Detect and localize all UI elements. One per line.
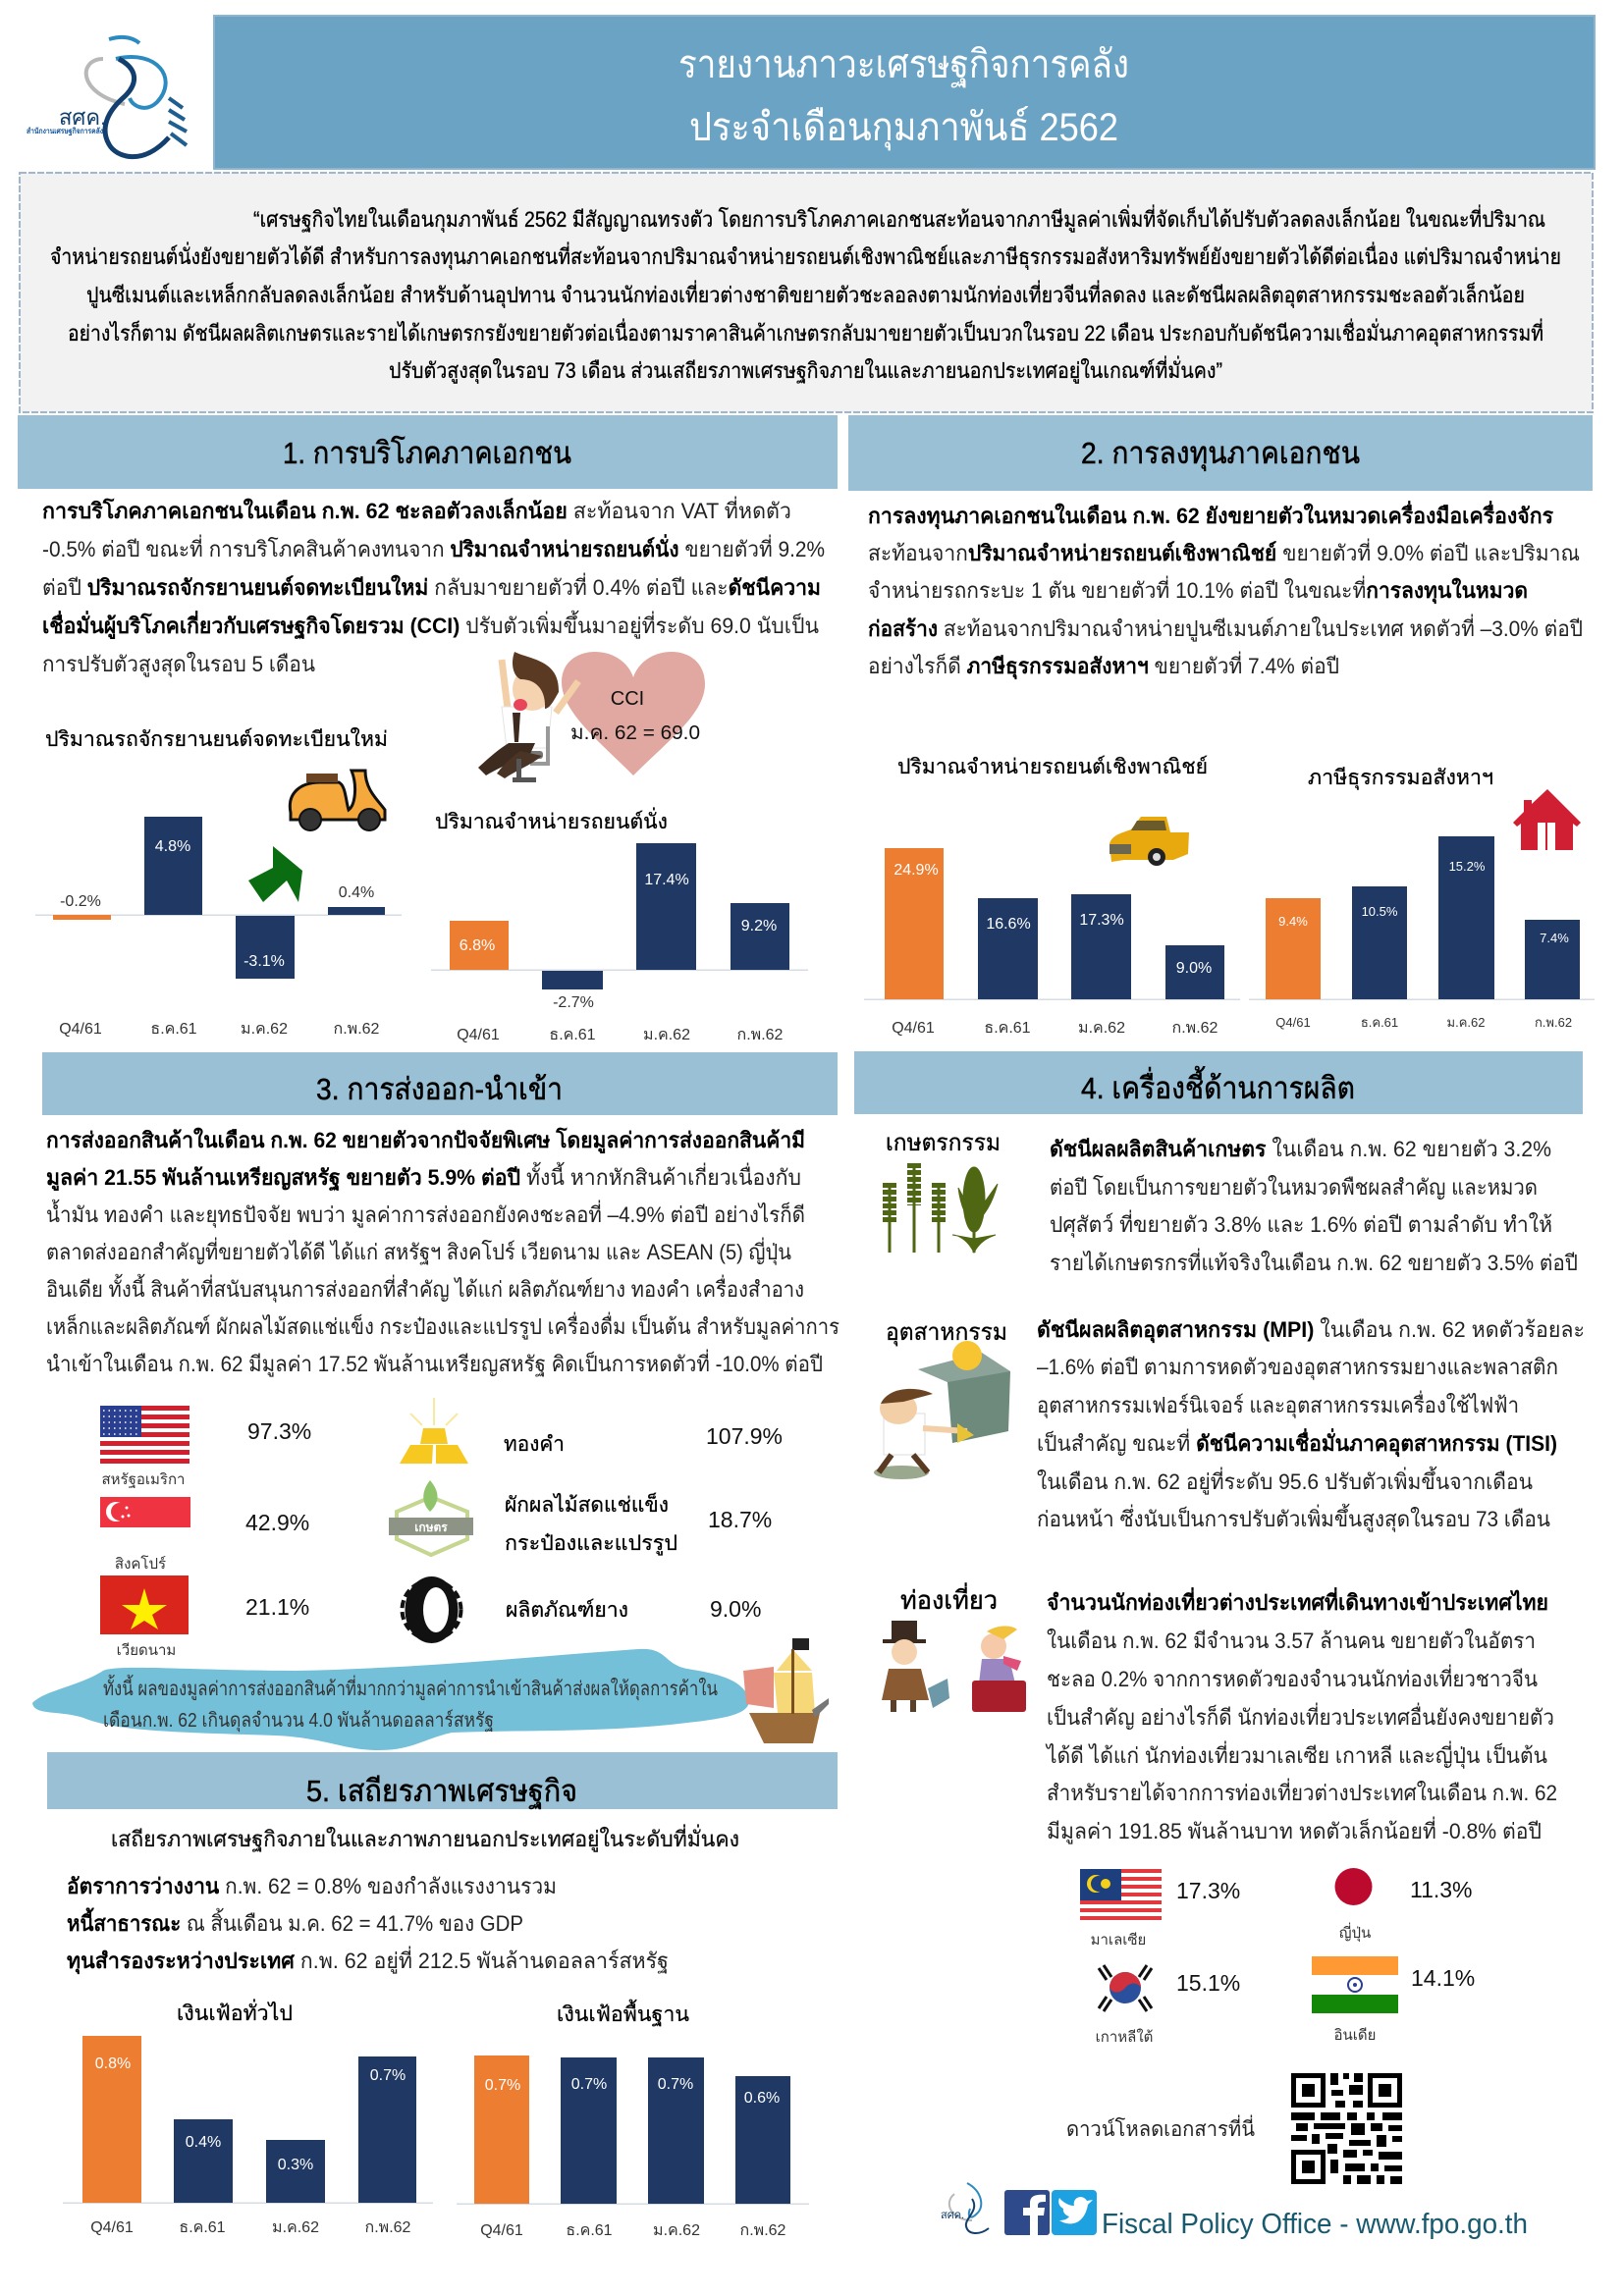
- chart title: real estate tax: ภาษีธุรกรรมอสังหาฯ: [1308, 767, 1493, 790]
- value: India: 14.1%: [1411, 1965, 1475, 1991]
- icon: gold bars: [400, 1398, 468, 1464]
- panel: section 1 private consumption: [18, 415, 838, 1043]
- title line 2: ประจำเดือนกุมภาพันธ์ 2562: [689, 105, 1118, 151]
- text block: agriculture: ต่อปี โดยเป็นการขยายตัวในหมวดพืชผลสำคัญ และหมวด: [1050, 1173, 1538, 1200]
- text block: tourism: ในเดือน ก.พ. 62 มีจำนวน 3.57 ล้านคน ขยายตัวในอัตรา: [1047, 1629, 1536, 1653]
- text block: tourism: ได้ดี ได้แก่ นักท่องเที่ยวมาเลเซีย เกาหลี และญี่ปุ่น เป็นต้น: [1045, 1740, 1547, 1769]
- heading 5: 5. เสถียรภาพเศรษฐกิจ: [306, 1774, 577, 1809]
- bar chart: commercial vehicles: 24.9%: [893, 862, 939, 879]
- text block 1: [42, 496, 825, 677]
- bar chart: motorcycle registrations: ม.ค.62: [241, 1021, 288, 1038]
- footer logo: [941, 2183, 989, 2233]
- text block 2: [868, 500, 1583, 680]
- value: rubber products: 9.0%: [710, 1596, 761, 1622]
- text block 3: การส่งออกสินค้าในเดือน ก.พ. 62 ขยายตัวจากปัจจัยพิเศษ โดยมูลค่าการส่งออกสินค้ามี: [46, 1127, 805, 1154]
- subheading 5: เสถียรภาพเศรษฐกิจภายในและภาพภายนอกประเทศอยู่ในระดับที่มั่นคง: [111, 1824, 739, 1852]
- value: Singapore: 42.9%: [245, 1510, 309, 1535]
- value: Malaysia: 17.3%: [1176, 1878, 1240, 1903]
- value: Vietnam: 21.1%: [245, 1594, 309, 1620]
- label: vegetables and fruit: ผักผลไม้สดแช่แข็ง: [505, 1491, 669, 1517]
- bar chart: core inflation: ธ.ค.61: [566, 2222, 613, 2239]
- label: vegetables and fruit: กระป๋องและแปรรูป: [505, 1532, 677, 1556]
- icon: tire: [403, 1576, 461, 1643]
- flag: India: อินเดีย: [1334, 2027, 1376, 2044]
- label: vegetables and fruit: [505, 1491, 677, 1556]
- flag: Japan: [1335, 1868, 1373, 1943]
- icon: tourists with luggage: [882, 1621, 1026, 1712]
- bar chart: headline inflation: 0.3%: [278, 2157, 313, 2173]
- bar chart: core inflation: [457, 2056, 809, 2239]
- icon: yellow pickup truck: [1110, 817, 1189, 866]
- chart title: core inflation: เงินเฟ้อพื้นฐาน: [557, 2000, 689, 2026]
- bar chart: headline inflation: ธ.ค.61: [179, 2219, 226, 2236]
- icon: heart with CCI: [562, 652, 705, 775]
- text block 1: เชื่อมั่นผู้บริโภคเกี่ยวกับเศรษฐกิจโดยรวม (CCI) ปรับตัวเพิ่มขึ้นมาอยู่ที่ระดับ 69.0 นับเป็น: [42, 610, 819, 640]
- panel: section 3 exports imports: [32, 1052, 839, 1750]
- label: industry: อุตสาหกรรม: [886, 1319, 1007, 1347]
- bar chart: commercial vehicles: 17.3%: [1079, 912, 1124, 929]
- label: rubber products: ผลิตภัณฑ์ยาง: [506, 1598, 628, 1622]
- bar chart: passenger cars: -2.7%: [553, 994, 594, 1011]
- bar chart: real estate tax: 9.4%: [1278, 914, 1308, 929]
- flag: Vietnam: เวียดนาม: [117, 1642, 176, 1659]
- heading 3: 3. การส่งออก-นำเข้า: [316, 1072, 563, 1106]
- bar chart: motorcycle registrations: 4.8%: [155, 838, 190, 855]
- label: agriculture: เกษตรกรรม: [886, 1130, 1001, 1156]
- icon: agriculture badge: [389, 1480, 473, 1555]
- text block 3: อินเดีย ทั้งนี้ สินค้าที่สนับสนุนการส่งออกที่สำคัญ ได้แก่ ผลิตภัณฑ์ยาง ทองคำ เครื่องสำอาง: [46, 1274, 804, 1303]
- icon: scooter: [290, 771, 385, 830]
- heading 4: 4. เครื่องชี้ด้านการผลิต: [1081, 1066, 1355, 1105]
- flag: Vietnam: [100, 1575, 189, 1659]
- icon: facebook: [1004, 2190, 1050, 2235]
- bar chart: real estate tax: 7.4%: [1540, 931, 1569, 945]
- text block 5: [67, 1874, 669, 1975]
- chart title: passenger cars: ปริมาณจำหน่ายรถยนต์นั่ง: [435, 807, 668, 833]
- text block: tourism: สำหรับรายได้จากการท่องเที่ยวต่างประเทศในเดือน ก.พ. 62: [1047, 1778, 1557, 1805]
- bar chart: headline inflation: 0.4%: [186, 2134, 221, 2151]
- flag: Japan: ญี่ปุ่น: [1339, 1922, 1371, 1943]
- summary box: [20, 173, 1593, 412]
- text block: industry: [1037, 1317, 1585, 1532]
- bar chart: passenger cars: [431, 843, 808, 1043]
- flag: Malaysia: [1080, 1869, 1162, 1949]
- bar chart: headline inflation: 0.8%: [95, 2056, 131, 2072]
- bar chart: headline inflation: ม.ค.62: [272, 2219, 319, 2236]
- flag: Korea: [1096, 1965, 1153, 2046]
- QR code: [1291, 2073, 1402, 2184]
- text block 3: มูลค่า 21.55 พันล้านเหรียญสหรัฐ ขยายตัว 5.9% ต่อปี ทั้งนี้ หากหักสินค้าเกี่ยวเนื่องกับ: [46, 1162, 801, 1192]
- value: Korea: 15.1%: [1176, 1970, 1240, 1996]
- text block: tourism: ชะลอ 0.2% จากการหดตัวของจำนวนนักท่องเที่ยวชาวจีน: [1047, 1664, 1538, 1691]
- bar chart: passenger cars: ธ.ค.61: [549, 1027, 596, 1043]
- bar chart: headline inflation: [63, 2036, 433, 2236]
- logo: fiscal policy office: สำนักงานเศรษฐกิจการคลัง: [27, 127, 103, 136]
- flag: Singapore: สิงคโปร์: [115, 1555, 166, 1573]
- bar chart: commercial vehicles: Q4/61: [892, 1020, 935, 1037]
- callout: trade balance water: เดือนก.พ. 62 เกินดุลจำนวน 4.0 พันล้านดอลลาร์สหรัฐ: [103, 1709, 494, 1733]
- bar chart: passenger cars: ม.ค.62: [643, 1027, 690, 1043]
- text: download here: ดาวน์โหลดเอกสารที่นี่: [1066, 2114, 1255, 2141]
- chart title: headline inflation: เงินเฟ้อทั่วไป: [177, 1999, 293, 2025]
- bar chart: motorcycle registrations: ก.พ.62: [334, 1021, 380, 1038]
- chart title: motorcycle registrations: ปริมาณรถจักรยานยนต์จดทะเบียนใหม่: [45, 727, 388, 751]
- bar chart: core inflation: 0.7%: [658, 2076, 693, 2093]
- text block 1: การบริโภคภาคเอกชนในเดือน ก.พ. 62 ชะลอตัวลงเล็กน้อย สะท้อนจาก VAT ที่หดตัว: [42, 496, 791, 523]
- bar chart: core inflation: 0.6%: [744, 2090, 780, 2107]
- bar chart: motorcycle registrations: [35, 817, 402, 1038]
- text block 2: การลงทุนภาคเอกชนในเดือน ก.พ. 62 ยังขยายตัวในหมวดเครื่องมือเครื่องจักร: [868, 500, 1553, 530]
- bar chart: real estate tax: Q4/61: [1275, 1015, 1311, 1030]
- text block: agriculture: รายได้เกษตรกรที่แท้จริงในเดือน ก.พ. 62 ขยายตัว 3.5% ต่อปี: [1050, 1248, 1578, 1275]
- bar chart: passenger cars: 6.8%: [460, 937, 495, 954]
- bar chart: passenger cars: 17.4%: [644, 872, 689, 888]
- icon: man at machine with light bulb: [874, 1341, 1010, 1479]
- bar chart: motorcycle registrations: -0.2%: [60, 893, 101, 910]
- value: USA: 97.3%: [247, 1418, 311, 1444]
- label: tourism: ท่องเที่ยว: [900, 1582, 998, 1615]
- bar chart: commercial vehicles: ม.ค.62: [1078, 1020, 1125, 1037]
- title banner: [214, 16, 1595, 169]
- bar chart: headline inflation: 0.7%: [370, 2067, 406, 2084]
- text block 3: นำเข้าในเดือน ก.พ. 62 มีมูลค่า 17.52 พันล้านเหรียญสหรัฐ คิดเป็นการหดตัวที่ -10.0% ต่อปี: [46, 1349, 823, 1377]
- icon: cheering man on chair: [478, 652, 578, 782]
- panel: section 5 stability: [47, 1752, 838, 2239]
- bar chart: headline inflation: ก.พ.62: [365, 2219, 411, 2236]
- text block: industry: เป็นสำคัญ ขณะที่ ดัชนีความเชื่อมั่นภาคอุตสาหกรรม (TISI): [1037, 1427, 1557, 1458]
- chart title: commercial vehicles: ปริมาณจำหน่ายรถยนต์เชิงพาณิชย์: [897, 755, 1208, 778]
- text block 2: จำหน่ายรถกระบะ 1 ตัน ขยายตัวที่ 10.1% ต่อปี ในขณะที่การลงทุนในหมวด: [868, 575, 1528, 605]
- bar chart: passenger cars: Q4/61: [457, 1027, 500, 1043]
- text block: tourism: เป็นสำคัญ อย่างไรก็ดี นักท่องเที่ยวประเทศอื่นยังคงขยายตัว: [1047, 1702, 1554, 1730]
- text block 1: การปรับตัวสูงสุดในรอบ 5 เดือน: [42, 652, 315, 677]
- text block 2: อย่างไรก็ดี ภาษีธุรกรรมอสังหาฯ ขยายตัวที่ 7.4% ต่อปี: [868, 651, 1339, 680]
- bar chart: real estate tax: ธ.ค.61: [1361, 1015, 1398, 1030]
- title line 1: รายงานภาวะเศรษฐกิจการคลัง: [678, 43, 1129, 88]
- icon: heart with CCI: CCI: [611, 688, 644, 710]
- text block 3: [46, 1127, 839, 1377]
- text block 3: เหล็กและผลิตภัณฑ์ ผักผลไม้สดแช่แข็ง กระป๋องและแปรรูป เครื่องดื่ม เป็นต้น สำหรับมูลค่าการ: [46, 1311, 839, 1340]
- text block 5: ทุนสำรองระหว่างประเทศ ก.พ. 62 อยู่ที่ 212.5 พันล้านดอลลาร์สหรัฐ: [67, 1946, 669, 1975]
- bar chart: motorcycle registrations: ธ.ค.61: [150, 1021, 197, 1038]
- value: Japan: 11.3%: [1410, 1877, 1473, 1902]
- icon: twitter: [1052, 2190, 1097, 2235]
- bar chart: commercial vehicles: ก.พ.62: [1172, 1020, 1218, 1037]
- bar chart: real estate tax: [1249, 836, 1595, 1030]
- text block: agriculture: ปศุสัตว์ ที่ขยายตัว 3.8% และ 1.6% ต่อปี ตามลำดับ ทำให้: [1050, 1209, 1552, 1238]
- text block: industry: อุตสาหกรรมเฟอร์นิเจอร์ และอุตสาหกรรมเครื่องใช้ไฟฟ้า: [1037, 1390, 1519, 1418]
- text block: agriculture: ดัชนีผลผลิตสินค้าเกษตร ในเดือน ก.พ. 62 ขยายตัว 3.2%: [1050, 1137, 1551, 1161]
- text block: industry: ในเดือน ก.พ. 62 อยู่ที่ระดับ 95.6 ปรับตัวเพิ่มขึ้นจากเดือน: [1037, 1467, 1533, 1495]
- text block: tourism: มีมูลค่า 191.85 พันล้านบาท หดตัวเล็กน้อยที่ -0.8% ต่อปี: [1047, 1816, 1542, 1844]
- text block 2: สะท้อนจากปริมาณจำหน่ายรถยนต์เชิงพาณิชย์ ขยายตัวที่ 9.0% ต่อปี และปริมาณ: [868, 538, 1580, 565]
- bar chart: motorcycle registrations: -3.1%: [244, 953, 285, 970]
- bar chart: commercial vehicles: ธ.ค.61: [984, 1020, 1031, 1037]
- flag: USA: สหรัฐอเมริกา: [102, 1471, 185, 1488]
- icon: red house: [1513, 789, 1581, 850]
- text block: agriculture: [1050, 1137, 1578, 1275]
- bar chart: commercial vehicles: 9.0%: [1176, 960, 1212, 977]
- bar chart: commercial vehicles: 16.6%: [986, 916, 1031, 933]
- bar chart: passenger cars: ก.พ.62: [737, 1027, 784, 1043]
- text block 2: ก่อสร้าง สะท้อนจากปริมาณจำหน่ายปูนซีเมนต์ภายในประเทศ หดตัวที่ –3.0% ต่อปี: [868, 614, 1583, 642]
- bar chart: passenger cars: 9.2%: [741, 918, 777, 934]
- footer logo: สศค.: [941, 2210, 964, 2221]
- text block: industry: ดัชนีผลผลิตอุตสาหกรรม (MPI) ในเดือน ก.พ. 62 หดตัวร้อยละ: [1037, 1317, 1585, 1344]
- flag: USA: [100, 1406, 189, 1488]
- text block 1: -0.5% ต่อปี ขณะที่ การบริโภคสินค้าคงทนจาก ปริมาณจำหน่ายรถยนต์นั่ง ขยายตัวที่ 9.2%: [42, 533, 825, 561]
- bar chart: headline inflation: Q4/61: [90, 2219, 134, 2236]
- bar chart: commercial vehicles: [864, 848, 1240, 1037]
- flag: Korea: เกาหลีใต้: [1096, 2028, 1153, 2046]
- callout: trade balance water: [32, 1649, 749, 1750]
- text block 3: ตลาดส่งออกสำคัญที่ขยายตัวได้ดี ได้แก่ สหรัฐฯ สิงคโปร์ เวียดนาม และ ASEAN (5) ญี่ปุ่น: [46, 1237, 791, 1265]
- text block: tourism: จำนวนนักท่องเที่ยวต่างประเทศที่เดินทางเข้าประเทศไทย: [1047, 1586, 1548, 1615]
- text: website: Fiscal Policy Office - www.fpo.go.th: [1102, 2209, 1528, 2240]
- bar chart: motorcycle registrations: Q4/61: [59, 1021, 102, 1038]
- bar chart: core inflation: 0.7%: [485, 2077, 520, 2094]
- value: gold: 107.9%: [706, 1423, 783, 1449]
- value: vegetables and fruit: 18.7%: [708, 1507, 772, 1532]
- label: gold: ทองคำ: [504, 1433, 565, 1456]
- icon: wheat and corn: [890, 1163, 998, 1253]
- bar chart: core inflation: ม.ค.62: [653, 2222, 700, 2239]
- summary box: ปรับตัวสูงสุดในรอบ 73 เดือน ส่วนเสถียรภาพเศรษฐกิจภายในและภายนอกประเทศอยู่ในเกณฑ์ที่มั่นคง”: [389, 355, 1222, 384]
- bar chart: real estate tax: 10.5%: [1362, 904, 1398, 919]
- text block 5: หนี้สาธารณะ ณ สิ้นเดือน ม.ค. 62 = 41.7% ของ GDP: [67, 1907, 523, 1936]
- icon: green arrow: [248, 846, 302, 902]
- icon: agriculture badge: เกษตร: [414, 1521, 448, 1534]
- panel: section 2 private investment: [848, 415, 1595, 1037]
- heading 1: 1. การบริโภคภาคเอกชน: [283, 436, 571, 470]
- text block 5: อัตราการว่างงาน ก.พ. 62 = 0.8% ของกำลังแรงงานรวม: [67, 1874, 557, 1898]
- text block: tourism: [1045, 1586, 1557, 1844]
- flag: India: [1312, 1956, 1398, 2044]
- flag: Singapore: [100, 1497, 190, 1573]
- panel: section 4 production indicators: [854, 1051, 1585, 2240]
- bar chart: real estate tax: ก.พ.62: [1535, 1015, 1572, 1030]
- text block: industry: ก่อนหน้า ซึ่งนับเป็นการปรับตัวเพิ่มขึ้นสูงสุดในรอบ 73 เดือน: [1037, 1504, 1550, 1532]
- text block: industry: –1.6% ต่อปี ตามการหดตัวของอุตสาหกรรมยางและพลาสติก: [1037, 1355, 1558, 1380]
- heading 2: 2. การลงทุนภาคเอกชน: [1081, 436, 1360, 472]
- bar chart: motorcycle registrations: 0.4%: [339, 884, 374, 901]
- bar chart: real estate tax: ม.ค.62: [1447, 1015, 1485, 1030]
- bar chart: core inflation: Q4/61: [480, 2222, 523, 2239]
- icon: heart with CCI: ม.ค. 62 = 69.0: [570, 722, 700, 744]
- logo: fiscal policy office: [27, 37, 187, 157]
- text block 1: ต่อปี ปริมาณรถจักรยานยนต์จดทะเบียนใหม่ กลับมาขยายตัวที่ 0.4% ต่อปี และดัชนีความ: [42, 572, 821, 600]
- bar chart: real estate tax: 15.2%: [1449, 859, 1486, 874]
- logo: fiscal policy office: สศค.: [59, 105, 106, 130]
- callout: trade balance water: ทั้งนี้ ผลของมูลค่าการส่งออกสินค้าที่มากกว่ามูลค่าการนำเข้าสินค้าส่งผลให้ดุลการค้าใน: [103, 1675, 718, 1701]
- text block 3: น้ำมัน ทองคำ และยุทธปัจจัย พบว่า มูลค่าการส่งออกยังคงชะลอที่ –4.9% ต่อปี อย่างไรก็ดี: [46, 1200, 805, 1228]
- bar chart: core inflation: ก.พ.62: [740, 2222, 786, 2239]
- bar chart: core inflation: 0.7%: [571, 2076, 607, 2093]
- flag: Malaysia: มาเลเซีย: [1091, 1932, 1146, 1949]
- icon: pirate ship: [743, 1638, 829, 1743]
